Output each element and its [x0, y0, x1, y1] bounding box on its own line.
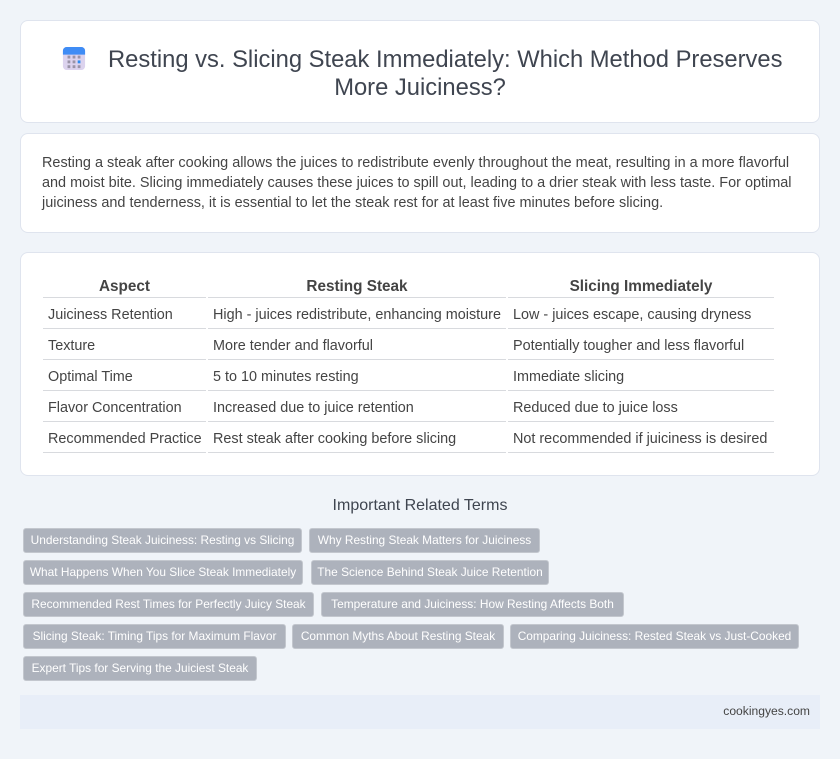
tag — [510, 624, 799, 649]
tag: Comparing Juiciness: Rested Steak vs Just-Cooked — [518, 629, 791, 643]
intro paragraph — [42, 155, 792, 211]
row: Flavor Concentration: Flavor Concentration — [48, 400, 182, 416]
row: Optimal Time: Optimal Time — [48, 369, 133, 385]
comparison table: Potentially tougher and less flavorful — [513, 338, 744, 354]
footer bar — [20, 695, 820, 729]
panel: title card — [20, 20, 820, 123]
comparison table — [43, 278, 774, 453]
header: Aspect: Aspect — [99, 278, 150, 295]
comparison table: Increased due to juice retention — [213, 400, 414, 416]
comparison table: Rest steak after cooking before slicing — [213, 431, 456, 447]
tag — [23, 624, 286, 649]
tag — [23, 528, 302, 553]
tag — [309, 528, 540, 553]
related term tags — [23, 528, 799, 681]
comparison table: More tender and flavorful — [213, 338, 373, 354]
tag: Slicing Steak: Timing Tips for Maximum Flavor — [33, 629, 276, 643]
tag — [23, 560, 303, 585]
tag: The Science Behind Steak Juice Retention — [317, 565, 543, 579]
comparison table: Low - juices escape, causing dryness — [513, 307, 751, 323]
tag — [321, 592, 624, 617]
row: Texture: Texture — [48, 338, 95, 354]
comparison table: High - juices redistribute, enhancing moisture — [213, 307, 501, 323]
comparison table: 5 to 10 minutes resting — [213, 369, 359, 385]
tag — [311, 560, 549, 585]
comparison table: Reduced due to juice loss — [513, 400, 678, 416]
comparison table: Not recommended if juiciness is desired — [513, 431, 767, 447]
tag: Recommended Rest Times for Perfectly Juicy Steak — [31, 597, 306, 611]
header: Resting Steak: Resting Steak — [306, 278, 408, 295]
title: Resting vs. Slicing Steak Immediately: Which Method Preserves — [108, 46, 782, 73]
tag: Common Myths About Resting Steak — [301, 629, 495, 643]
header: Slicing Immediately: Slicing Immediately — [570, 278, 712, 295]
intro paragraph: juiciness and tenderness, it is essential to let the steak rest for at least five minutes before slicing. — [42, 195, 663, 211]
intro paragraph: and moist bite. Slicing immediately causes these juices to spill out, leading to a drier steak with less taste. For optimal — [42, 175, 792, 191]
icon: calendar — [62, 47, 86, 70]
comparison table: Immediate slicing — [513, 369, 624, 385]
row: Juiciness Retention: Juiciness Retention — [48, 307, 173, 323]
row: Recommended Practice: Recommended Practice — [48, 431, 202, 447]
heading: Important Related Terms: Important Related Terms — [333, 497, 507, 514]
intro paragraph: Resting a steak after cooking allows the juices to redistribute evenly throughout the meat, resulting in a more flavorful — [42, 155, 789, 171]
tag: Expert Tips for Serving the Juiciest Steak — [32, 661, 248, 675]
tag: Temperature and Juiciness: How Resting Affects Both — [331, 597, 614, 611]
title second line: More Juiciness? — [334, 74, 506, 101]
tag — [23, 592, 314, 617]
tag — [292, 624, 504, 649]
panel: intro text card — [20, 133, 820, 233]
tag: Understanding Steak Juiciness: Resting vs Slicing — [31, 533, 294, 547]
tag — [23, 656, 257, 681]
footer credit: cookingyes.com — [723, 704, 810, 718]
panel: comparison table card — [20, 252, 820, 476]
tag: What Happens When You Slice Steak Immediately — [30, 565, 296, 579]
tag: Why Resting Steak Matters for Juiciness — [318, 533, 531, 547]
